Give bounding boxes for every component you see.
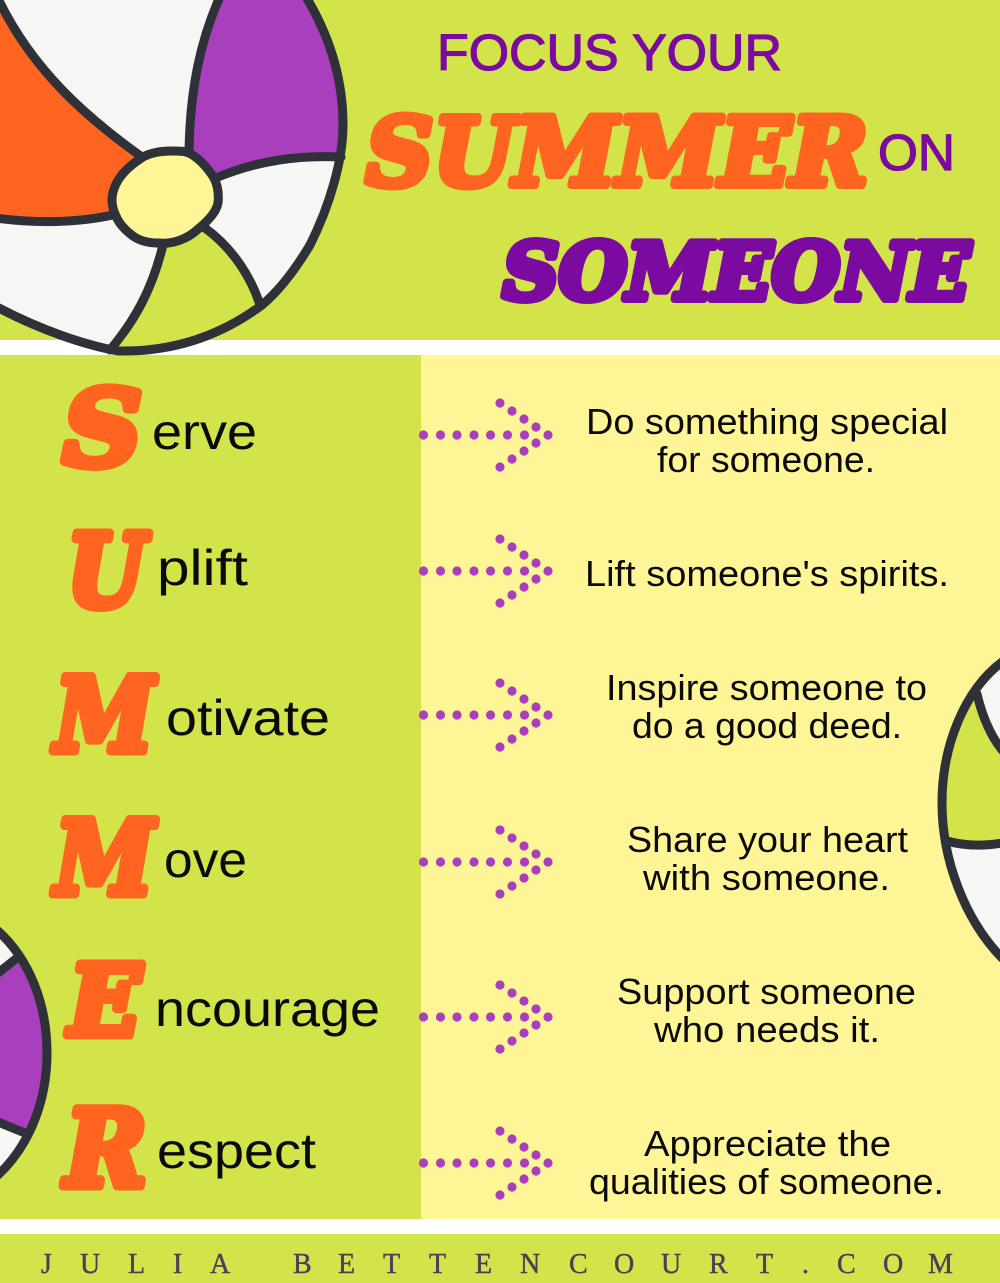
panel: left lime column [0, 355, 421, 1219]
word ove: ove [164, 832, 247, 888]
description: qualities of someone. [589, 1161, 944, 1202]
icon: beach ball left edge [0, 931, 47, 1175]
title: on: ON [878, 124, 955, 181]
arrow [419, 398, 553, 472]
big letter R: R [62, 1086, 147, 1211]
description: Lift someone's spirits. [585, 553, 949, 594]
row: Serve [63, 367, 948, 490]
panel: footer background [0, 1234, 1000, 1283]
big letter E: E [66, 944, 143, 1058]
word espect: espect [157, 1123, 316, 1179]
word plift: plift [157, 540, 248, 596]
row: Uplift [67, 512, 949, 630]
big letter M: M [52, 799, 157, 919]
description: Support someone [617, 971, 916, 1012]
panel: right yellow column [421, 355, 1000, 1219]
arrow [419, 1126, 553, 1200]
description: do a good deed. [632, 705, 902, 746]
description: for someone. [657, 439, 875, 480]
description: Inspire someone to [606, 667, 927, 708]
arrow [419, 825, 553, 899]
big letter U: U [67, 512, 150, 630]
big letter M: M [52, 656, 157, 776]
description: Appreciate the [644, 1123, 891, 1164]
word erve: erve [152, 404, 257, 460]
title: Focus your: FOCUS YOUR [437, 24, 782, 81]
description: Share your heart [627, 819, 908, 860]
arrow [419, 980, 553, 1054]
row: Motivate [52, 656, 927, 776]
footer text: JULIA BETTENCOURT.COM [41, 1249, 953, 1280]
description: Do something special [586, 401, 948, 442]
icon: beach ball top left [0, 0, 343, 351]
big letter S: S [63, 367, 142, 490]
description: who needs it. [653, 1009, 880, 1050]
row: Move [52, 799, 908, 919]
title: Someone: SOMEONE [503, 227, 972, 318]
arrow [419, 534, 553, 608]
arrow [419, 678, 553, 752]
description: with someone. [642, 857, 890, 898]
word ncourage: ncourage [155, 981, 380, 1037]
panel: header background [0, 0, 1000, 340]
title: Summer: SUMMER [366, 98, 868, 208]
word otivate: otivate [166, 690, 330, 746]
row: Encourage [66, 944, 916, 1058]
icon: beach ball right edge [942, 662, 1000, 958]
row: Respect [62, 1086, 944, 1211]
